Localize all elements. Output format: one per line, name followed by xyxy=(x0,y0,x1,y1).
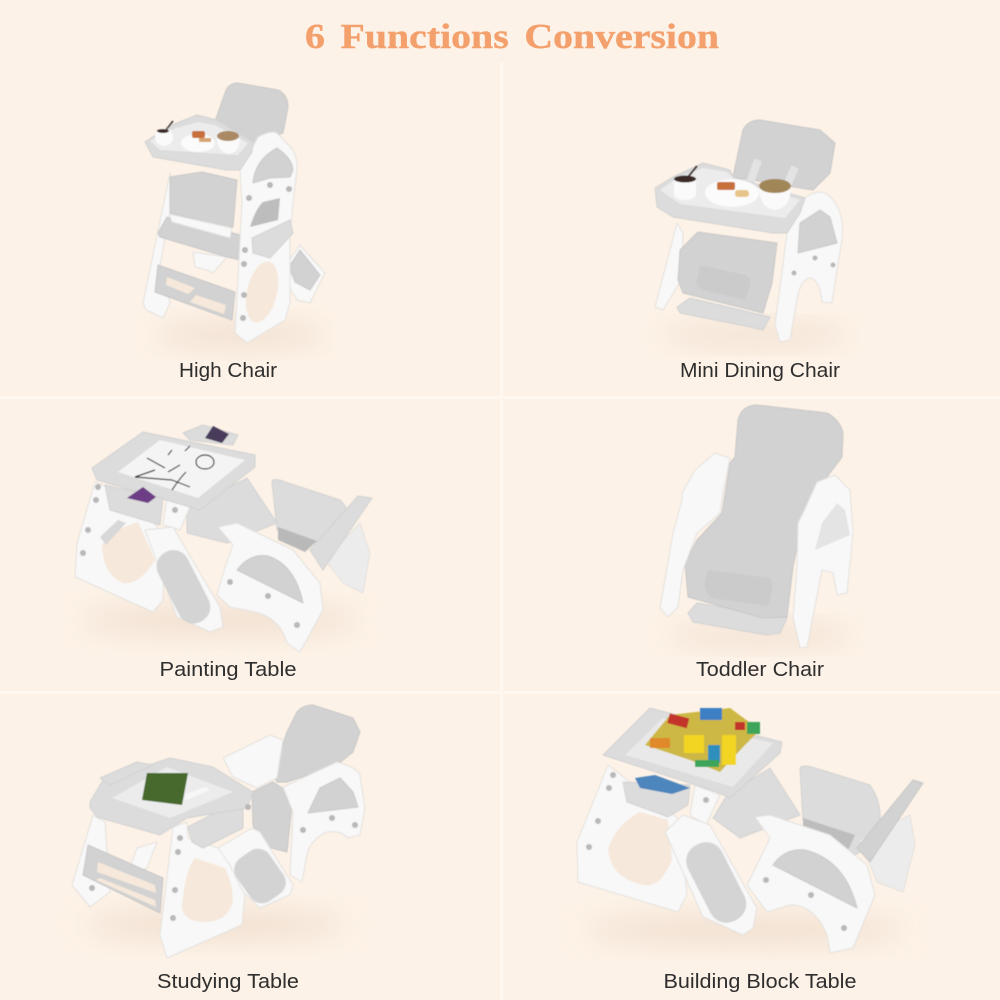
arch panel xyxy=(815,503,850,550)
chair seat xyxy=(800,766,880,855)
paddle inset xyxy=(680,836,752,929)
left frame xyxy=(577,765,687,912)
chair arch frame xyxy=(217,523,323,652)
right side panel xyxy=(325,523,370,593)
backrest xyxy=(857,780,923,862)
chair seat xyxy=(272,480,347,543)
front leg xyxy=(690,785,720,825)
harness straps xyxy=(750,160,795,190)
seat back xyxy=(213,83,288,145)
steps xyxy=(155,265,235,320)
rear pencils xyxy=(205,426,229,443)
left leg xyxy=(72,815,110,907)
right side panel xyxy=(860,815,915,892)
rear legs xyxy=(193,252,227,273)
panel: building block table xyxy=(577,708,923,953)
panel: painting table xyxy=(75,425,372,652)
table top xyxy=(90,758,253,835)
left arm xyxy=(660,453,730,617)
tray food xyxy=(674,166,791,210)
chair left arm xyxy=(223,735,283,788)
arch panel xyxy=(253,148,293,183)
seat and back cushion xyxy=(685,405,843,618)
label: high chair: High Chair xyxy=(179,360,277,382)
platform xyxy=(158,217,247,260)
screws xyxy=(586,772,847,931)
oval opening xyxy=(240,258,284,326)
label: studying table: Studying Table xyxy=(157,971,299,993)
book xyxy=(142,773,188,805)
label: mini dining chair: Mini Dining Chair xyxy=(680,360,840,382)
frame hole xyxy=(102,522,155,583)
rear basket xyxy=(183,425,238,445)
tray inner xyxy=(660,168,800,218)
footplate xyxy=(677,298,770,330)
tray inner xyxy=(150,122,248,155)
seat xyxy=(678,232,777,313)
stud plate xyxy=(625,718,773,787)
frame oval opening xyxy=(182,858,233,922)
panel: mini dining chair xyxy=(655,120,850,345)
panel: toddler chair xyxy=(660,405,855,648)
front frame xyxy=(160,822,245,958)
screws xyxy=(80,484,300,628)
front leg xyxy=(163,497,190,530)
label: painting table: Painting Table xyxy=(160,659,296,681)
right arch frame xyxy=(283,762,365,882)
half moon panel xyxy=(773,850,857,908)
tray xyxy=(145,115,253,170)
cross bar xyxy=(100,520,126,545)
seat back xyxy=(273,705,360,782)
screws xyxy=(89,804,358,921)
seat shadow xyxy=(278,527,317,552)
paddle xyxy=(665,815,757,935)
arch panel xyxy=(308,778,358,813)
paddle inset xyxy=(289,250,320,290)
paddle inset xyxy=(229,843,291,909)
seat xyxy=(170,172,237,227)
label: toddler chair: Toddler Chair xyxy=(696,659,824,681)
table top xyxy=(92,432,255,510)
half moon panel xyxy=(237,556,303,603)
backrest xyxy=(310,496,372,570)
label: building block table: Building Block Table xyxy=(664,971,856,993)
paddle xyxy=(287,245,325,303)
right arch frame xyxy=(775,192,843,342)
paddle xyxy=(145,527,223,632)
rear grey legs xyxy=(713,768,800,838)
paddle xyxy=(218,828,293,908)
board doodles xyxy=(135,446,214,490)
steps xyxy=(83,845,163,913)
front pencils xyxy=(127,487,156,503)
footplate xyxy=(688,603,787,635)
front basket xyxy=(105,485,163,525)
rear grey legs xyxy=(187,478,277,543)
rear leg xyxy=(127,842,157,875)
basket xyxy=(188,805,243,848)
left leg xyxy=(143,173,173,318)
title: 6 Functions Conversion xyxy=(305,17,719,56)
seat shadow xyxy=(803,818,855,850)
book pages xyxy=(184,787,210,801)
screws xyxy=(240,182,292,321)
table handle xyxy=(100,762,153,785)
seat inset xyxy=(697,265,750,300)
panel: high chair xyxy=(143,83,325,347)
seat back xyxy=(733,120,835,190)
arch panel xyxy=(798,210,837,253)
screws xyxy=(792,256,836,276)
blocks xyxy=(645,708,760,772)
left leg xyxy=(655,223,683,310)
tray food xyxy=(155,121,240,154)
cushion inset xyxy=(705,570,772,606)
table inset xyxy=(112,767,233,818)
tray xyxy=(655,163,805,233)
table top xyxy=(603,708,782,798)
panel: studying table xyxy=(72,705,365,958)
left frame xyxy=(75,482,165,612)
basket xyxy=(252,220,293,258)
drawing board xyxy=(118,440,245,498)
arch opening xyxy=(250,198,280,227)
paddle inset xyxy=(151,545,216,629)
chair arch frame xyxy=(747,815,875,953)
right arch frame xyxy=(235,132,297,343)
steps opening xyxy=(96,862,156,907)
right arch frame xyxy=(793,475,853,648)
seat foot edge xyxy=(169,214,232,238)
basket blocks xyxy=(635,775,690,794)
chair seat xyxy=(252,782,293,852)
frame hole xyxy=(608,812,672,885)
basket xyxy=(623,782,690,817)
